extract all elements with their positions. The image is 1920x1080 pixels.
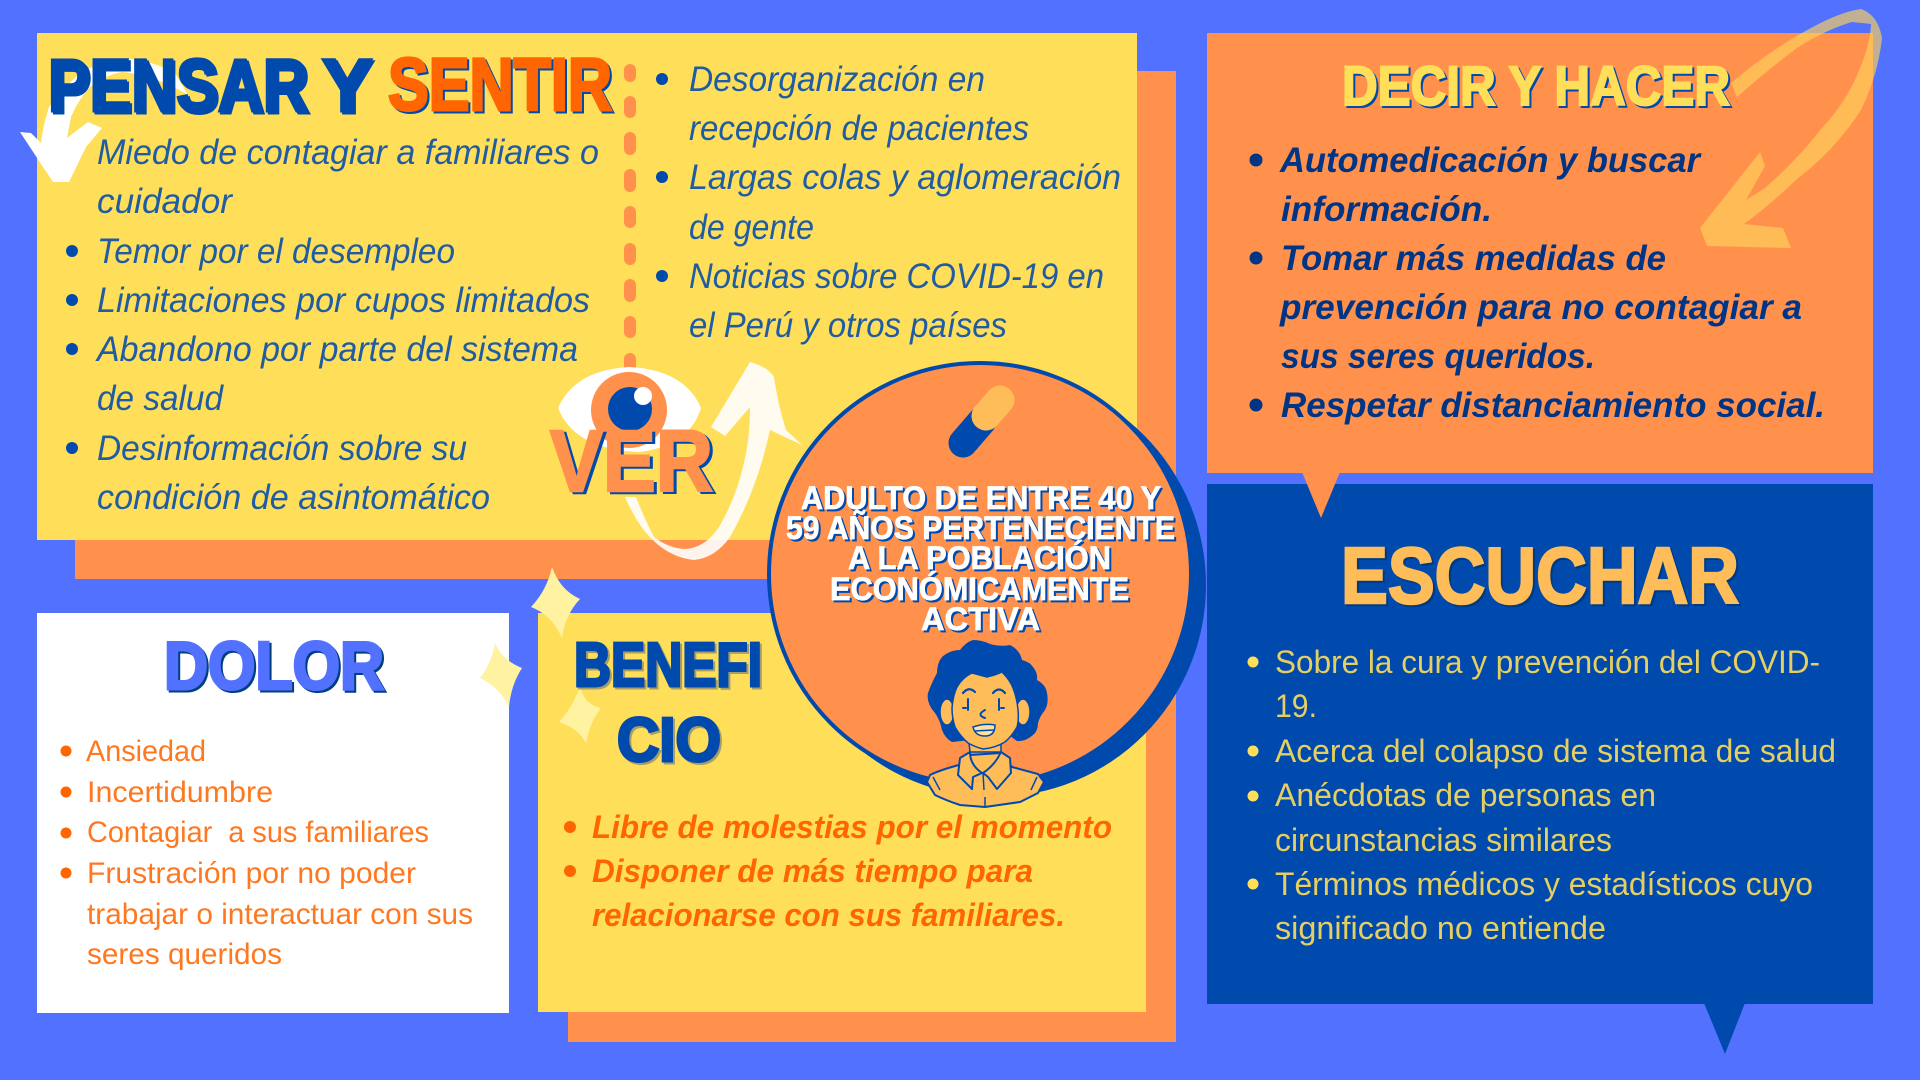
speech tail: decir (1302, 472, 1340, 518)
list: left column: condición de asintomático (97, 478, 490, 517)
list: left column: cuidador (97, 182, 233, 221)
list: dolor: Ansiedad (86, 735, 206, 768)
panel: dolor (37, 613, 509, 1013)
list: escuchar: significado no entiende (1275, 910, 1606, 946)
list: decir y hacer: sus seres queridos. (1281, 337, 1595, 376)
list: right column: Noticias sobre COVID-19 en (689, 257, 1104, 296)
heading: ver: VER (550, 413, 713, 510)
list: dolor: Contagiar a sus familiares (87, 816, 429, 849)
persona description: ECONÓMICAMENTE (830, 571, 1129, 607)
list: beneficio (564, 809, 1112, 933)
list: dolor: seres queridos (87, 938, 282, 971)
list: escuchar: Términos médicos y estadísticos cuyo (1275, 866, 1813, 902)
list: left column: de salud (97, 379, 224, 418)
list: left column (66, 133, 599, 517)
icon: cream arrow from ver (625, 362, 802, 560)
list: decir y hacer: información. (1281, 190, 1492, 229)
list: right column: Largas colas y aglomeración (689, 158, 1121, 197)
list: escuchar: 19. (1275, 688, 1317, 724)
list: escuchar: circunstancias similares (1275, 822, 1612, 858)
icon: eye (558, 367, 701, 452)
central persona circle (769, 363, 1206, 807)
persona description: ACTIVA (921, 601, 1040, 637)
title: pensar y sentir (48, 43, 612, 127)
icon: person (927, 640, 1048, 807)
list: left column: Temor por el desempleo (97, 232, 455, 271)
speech tail: escuchar (1704, 1003, 1745, 1054)
icon: ears (940, 699, 1030, 725)
icon: curved arrow (1700, 9, 1882, 248)
heading: beneficio (574, 631, 762, 775)
persona description: ADULTO DE ENTRE 40 Y (801, 480, 1161, 516)
persona description: 59 AÑOS PERTENECIENTE (786, 510, 1175, 546)
list: right column: de gente (689, 208, 814, 247)
list: decir y hacer (1250, 141, 1825, 425)
list: left column: Abandono por parte del sistema (95, 330, 578, 369)
divider: dashed line (624, 64, 636, 375)
list: dolor: trabajar o interactuar con sus (87, 898, 473, 931)
list: left column: Desinformación sobre su (97, 429, 467, 468)
icon: pill (963, 400, 1000, 443)
list: dolor (60, 735, 473, 971)
panel: beneficio (538, 613, 1176, 1042)
list: right column: el Perú y otros países (689, 306, 1007, 345)
icon: sparkle top (531, 567, 580, 638)
heading: escuchar: ESCUCHAR (1341, 531, 1739, 620)
list: beneficio: Disponer de más tiempo para (592, 853, 1033, 889)
list: escuchar: Anécdotas de personas en (1275, 777, 1656, 813)
heading: dolor: DOLOR (164, 628, 384, 704)
list: dolor: Frustración por no poder (87, 857, 416, 890)
list: left column: Miedo de contagiar a familiares o (97, 133, 599, 172)
list: left column: Limitaciones por cupos limitados (97, 281, 590, 320)
list: beneficio: Libre de molestias por el momento (592, 809, 1112, 845)
list: escuchar (1248, 644, 1836, 946)
persona description (786, 480, 1175, 637)
list: decir y hacer: Tomar más medidas de (1281, 239, 1666, 278)
list: right column: recepción de pacientes (689, 109, 1029, 148)
list: escuchar: Acerca del colapso de sistema de salud (1275, 733, 1836, 769)
title: pensar y sentir: PENSAR (48, 44, 308, 127)
title: pensar y sentir: SENTIR (388, 43, 612, 126)
list: decir y hacer: Automedicación y buscar (1279, 141, 1702, 180)
icon: white curved arrow (20, 59, 188, 182)
icon: sparkle middle (480, 643, 522, 707)
panel: decir y hacer (1207, 9, 1882, 518)
list: right column: Desorganización en (689, 60, 985, 99)
list: right column (656, 60, 1121, 345)
icon: sparkle lower (559, 687, 601, 743)
panel: escuchar (1207, 484, 1873, 1054)
title: pensar y sentir: Y (322, 44, 372, 127)
list: beneficio: relacionarse con sus familiares. (592, 897, 1065, 933)
persona description: A LA POBLACIÓN (848, 540, 1111, 576)
list: escuchar: Sobre la cura y prevención del COVID- (1275, 644, 1820, 680)
heading: decir y hacer: DECIR Y HACER (1342, 54, 1730, 117)
heading: beneficio: CIO (617, 706, 721, 775)
list: decir y hacer: Respetar distanciamiento social. (1281, 386, 1825, 425)
list: dolor: Incertidumbre (87, 776, 273, 809)
list: decir y hacer: prevención para no contagiar a (1279, 288, 1802, 327)
panel: pensar y sentir (20, 33, 1176, 579)
heading: beneficio: BENEFI (574, 631, 762, 700)
